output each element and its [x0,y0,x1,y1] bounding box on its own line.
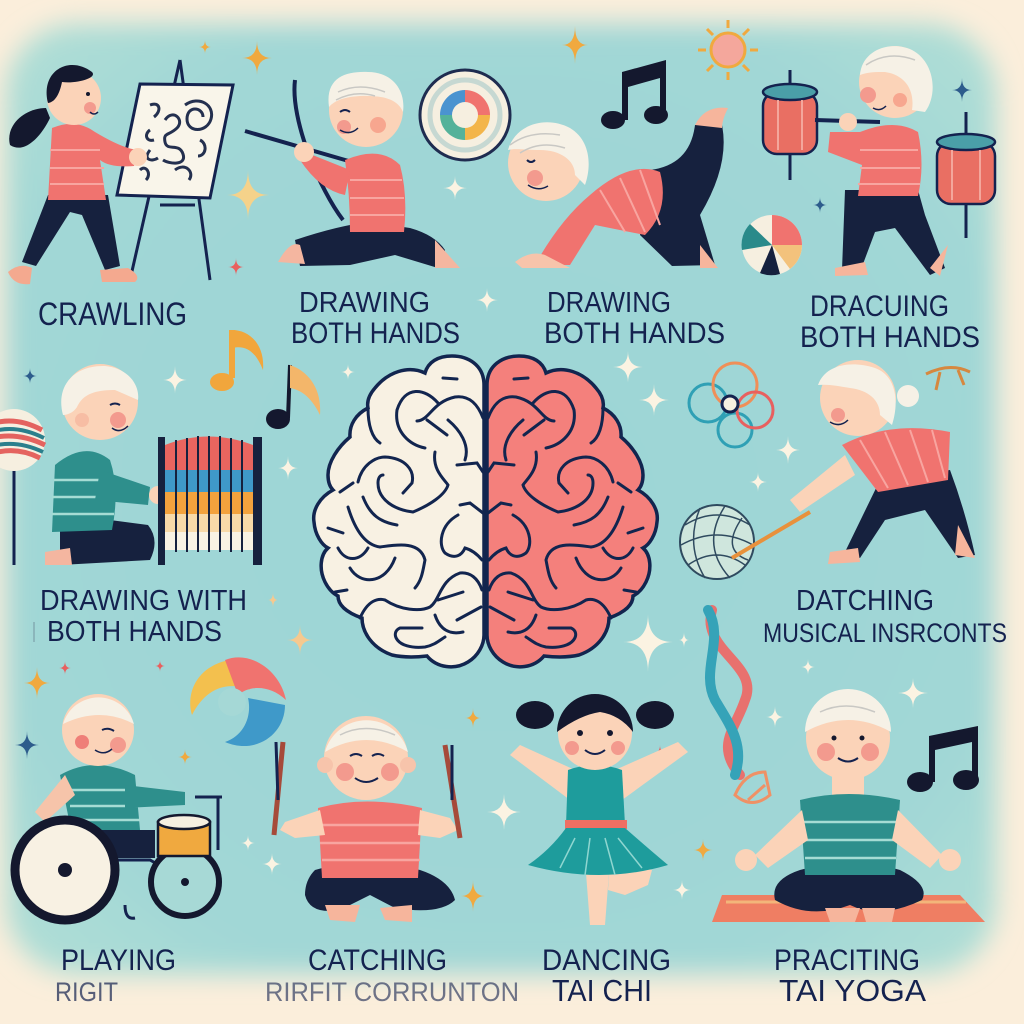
row two captions: BOTH HANDS [47,616,222,648]
row three captions: TAI YOGA [779,973,926,1008]
hanging drum left [763,70,817,180]
row two captions [33,585,1007,648]
kneeling person [278,72,460,268]
color wheel disc [420,70,510,160]
sun icon [698,20,758,80]
row one captions: CRAWLING [38,296,187,332]
brain left hemisphere [314,356,484,667]
drumsticks [274,742,460,838]
crawling person [508,108,728,268]
row three captions: DANCING [542,944,671,977]
activity: kneeling figure with brush [245,70,510,268]
music note [601,60,668,129]
brain right hemisphere [487,356,657,667]
yoga mat [712,895,985,922]
activity: figure playing hanging drums [698,20,995,276]
activity: seated figure with drumsticks [274,716,460,922]
row three captions: PRACITING [774,944,920,977]
activity: playing xylophone [0,330,320,565]
hanging drum right [937,112,995,238]
painter girl [8,65,147,284]
row three captions [55,944,926,1008]
row three captions: CATCHING [308,944,447,977]
drum [158,797,222,856]
long brushes [245,80,352,220]
row two captions: DATCHING [796,585,934,617]
row one captions: BOTH HANDS [800,321,980,354]
row one captions: BOTH HANDS [544,317,725,350]
small swirl [735,772,770,802]
yarn ball [0,409,45,565]
row one captions [38,287,980,354]
music notes [210,330,320,429]
easel [117,60,233,280]
wheelchair wheels [15,820,219,920]
row one captions: DRAWING [547,287,671,319]
cross-legged person [280,716,458,922]
beach ball [742,215,802,275]
row one captions: BOTH HANDS [291,317,460,350]
row one captions: DRACUING [810,290,949,323]
xylophone [158,436,262,565]
wire ball with stick [680,505,810,579]
small orange arc [926,367,970,390]
row three captions: RIGIT [55,977,118,1007]
bending person [790,360,975,564]
overlapping rings [689,363,773,447]
seated person [45,364,167,565]
row three captions: PLAYING [61,944,176,977]
ribbon helix [708,610,747,775]
activity: dancing girl [510,610,770,925]
activity: crawling figure [508,60,802,275]
seated person [35,694,185,858]
activity: girl painting at easel [8,60,233,284]
pinwheel [190,657,286,746]
activity: yoga figure [712,689,985,922]
meditating person [735,689,961,922]
central brain [314,356,657,667]
row one captions: DRAWING [299,287,430,319]
music note [907,726,979,792]
activity: wheelchair drummer [15,657,286,920]
row three captions: RIRFIT CORRUNTON [265,977,519,1007]
row three captions: TAI CHI [552,973,652,1008]
activity: rolling yarn ball [680,360,975,579]
girl [510,694,688,925]
drumming person [815,46,948,276]
row two captions: DRAWING WITH [40,585,247,617]
